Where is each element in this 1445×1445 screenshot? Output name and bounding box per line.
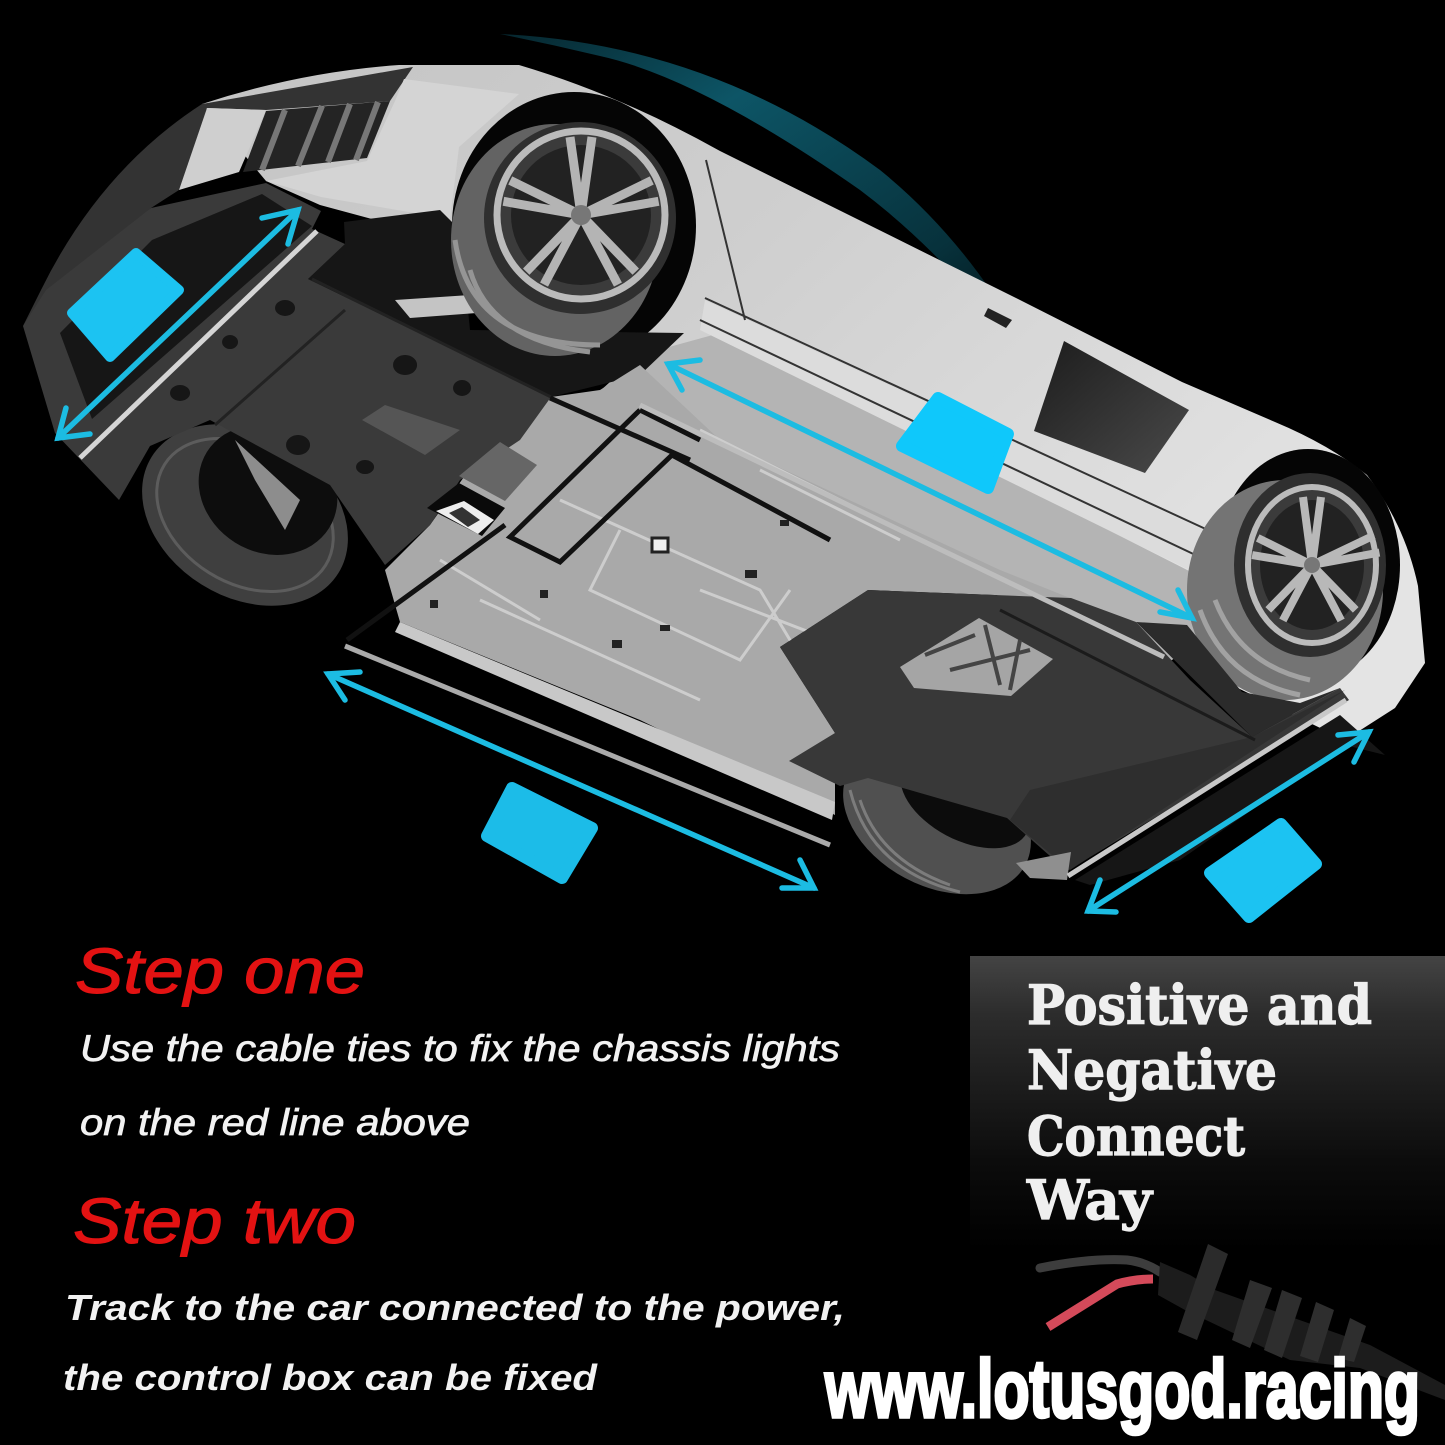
panel heading: Negative	[1027, 1038, 1277, 1102]
step one heading: Step one	[75, 935, 365, 1007]
step one instructions: on the red line above	[80, 1102, 470, 1143]
door lines	[700, 160, 1210, 560]
vent slats	[262, 102, 378, 170]
lower front wheel	[108, 387, 382, 643]
floor panel lines	[440, 430, 900, 700]
panel heading	[1026, 973, 1372, 1232]
arrow: front bumper	[58, 210, 298, 438]
wiring harness	[347, 398, 830, 640]
step two instructions: the control box can be fixed	[63, 1357, 598, 1398]
blue pad: front	[72, 253, 179, 357]
lower sill panel	[590, 333, 1201, 665]
front fender	[266, 79, 519, 219]
black wire	[1040, 1260, 1160, 1272]
step one instructions: Use the cable ties to fix the chassis lights	[80, 1028, 840, 1069]
underbody floor	[385, 365, 1165, 815]
blue pad: lower side	[487, 788, 592, 878]
control box	[427, 483, 505, 536]
rear under-tray	[1010, 690, 1345, 870]
front plate intake	[362, 405, 460, 455]
car illustration	[23, 65, 1425, 925]
front wheel arch	[452, 92, 696, 360]
upper front wheel	[451, 122, 676, 356]
front plate holes	[170, 300, 471, 474]
rear diffuser	[1075, 715, 1385, 885]
arrow: upper side	[668, 360, 1192, 618]
bottom silver lip	[1016, 852, 1071, 880]
rear wheel arch	[1216, 449, 1400, 681]
door handle	[984, 308, 1012, 328]
teal motion arc	[500, 34, 1050, 395]
step one instructions	[80, 1028, 840, 1143]
front bumper opening	[60, 194, 312, 419]
LED strip: side lower	[345, 646, 830, 845]
front underbody plate	[23, 183, 551, 565]
front plate seam	[215, 279, 551, 425]
cable connector	[1158, 1244, 1445, 1400]
arrow: rear	[1088, 732, 1369, 912]
engine shading	[925, 625, 1030, 690]
upper rear wheel	[1187, 473, 1386, 700]
control box housing	[459, 442, 537, 501]
floor vent	[652, 538, 668, 552]
rear plate band below tire	[1136, 622, 1340, 737]
front hood mesh	[23, 67, 413, 326]
LED strip: rear	[1068, 700, 1346, 876]
suspension arm	[395, 295, 490, 318]
step two heading: Step two	[73, 1185, 356, 1257]
side window	[1034, 341, 1189, 473]
suspension cavity	[308, 210, 684, 397]
red wire	[1048, 1279, 1153, 1327]
panel: positive and negative	[970, 956, 1445, 1445]
panel heading: Positive and	[1027, 973, 1372, 1037]
blue pad: upper side	[902, 398, 1008, 488]
lower rear wheel	[817, 711, 1057, 925]
LED strip: side upper	[640, 405, 1164, 657]
panel heading: Way	[1026, 1168, 1154, 1232]
engine detail	[900, 618, 1053, 696]
arrow: lower side	[328, 672, 814, 888]
step two instructions: Track to the car connected to the power,	[65, 1287, 845, 1328]
floor holes	[430, 520, 789, 648]
hood light panel	[179, 108, 266, 190]
step two instructions	[63, 1287, 845, 1398]
rear seam	[1000, 610, 1255, 740]
sill highlight	[700, 300, 1210, 578]
lower side skirt	[395, 622, 835, 820]
car body	[202, 65, 1425, 740]
panel heading: Connect	[1027, 1104, 1245, 1168]
LED strip: front	[80, 231, 317, 458]
blue pad: rear	[1210, 824, 1316, 917]
hood vents	[243, 101, 390, 172]
rear underbody plate	[780, 590, 1349, 871]
